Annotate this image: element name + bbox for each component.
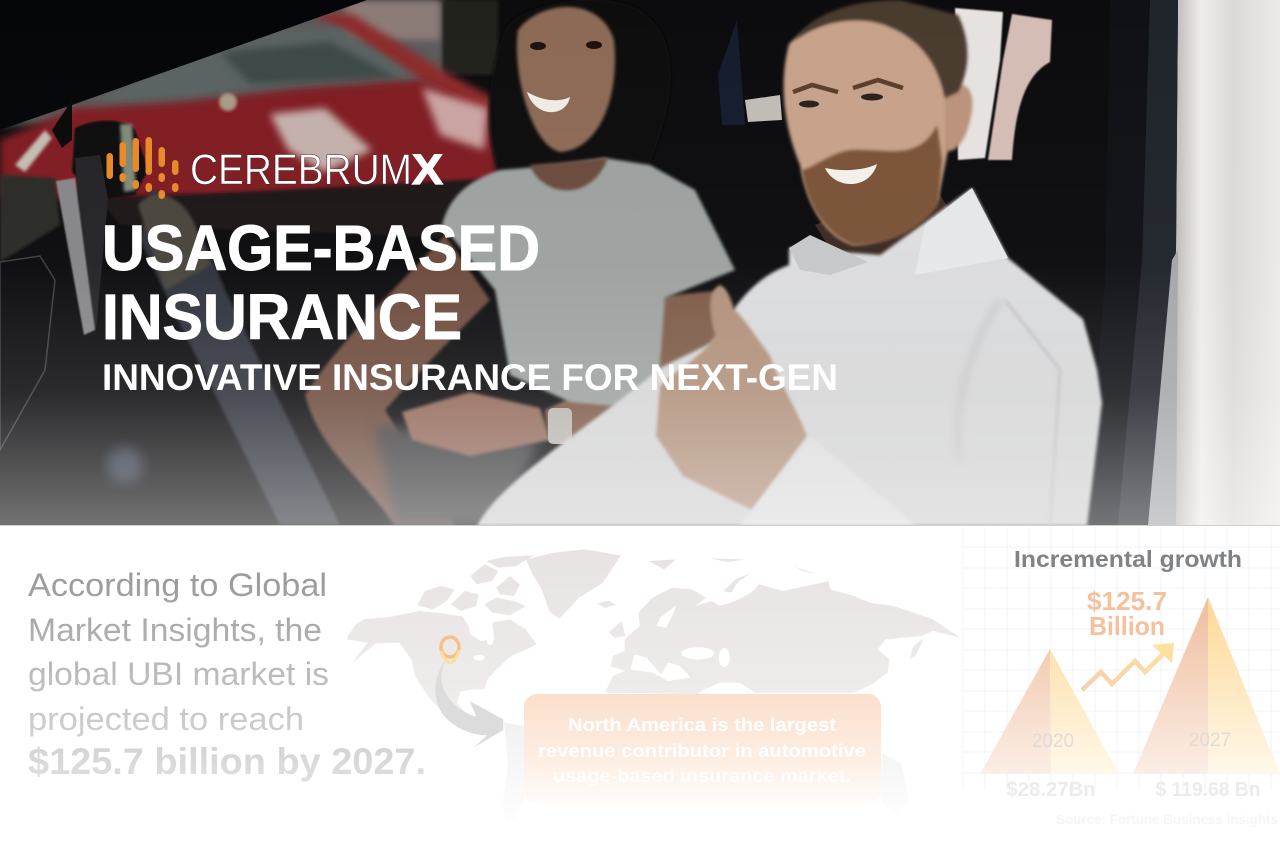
face <box>784 14 950 245</box>
man <box>477 0 1102 526</box>
title: INSURANCE <box>102 281 462 353</box>
icon: location pin <box>441 637 459 663</box>
logo: CerebrumX: X <box>412 146 443 194</box>
door pillar right <box>1175 0 1280 525</box>
panel: incremental growth chart <box>963 527 1280 827</box>
woman <box>305 0 735 525</box>
text block: market projection: $125.7 billion by 2027. <box>28 741 426 782</box>
shirt <box>477 188 1102 526</box>
title <box>102 212 540 353</box>
triangle: 2020 <box>980 649 1119 801</box>
dashboard and sill <box>0 175 60 262</box>
ear <box>945 84 972 151</box>
door pillar, dark wedge top left <box>0 0 367 130</box>
forearm <box>545 290 724 440</box>
subtitle: INNOVATIVE INSURANCE FOR NEXT-GEN <box>102 357 838 398</box>
world map <box>347 549 960 831</box>
triangle: 2027 <box>1133 597 1280 801</box>
wordmark: CEREBRUM <box>190 146 412 194</box>
beard <box>802 125 942 245</box>
inland seas <box>474 605 730 667</box>
callout: North America: revenue contributor in automotive <box>538 740 866 761</box>
teeth <box>825 164 877 184</box>
infotainment screen <box>75 155 108 330</box>
wing mirror <box>72 121 148 200</box>
value label: Billion <box>1089 611 1165 641</box>
text block: market projection <box>28 567 426 782</box>
text block: market projection: According to Global <box>28 567 327 603</box>
title: USAGE-BASED <box>102 212 540 284</box>
top <box>442 158 735 410</box>
watch <box>548 408 572 444</box>
growth arrow <box>1082 643 1174 690</box>
arm <box>305 235 490 525</box>
triangle: 2020: $28.27Bn <box>1006 779 1096 801</box>
hair <box>795 0 967 98</box>
curved arrow <box>435 651 503 748</box>
callout: North America <box>524 694 881 804</box>
callout: North America: North America is the largest <box>568 714 836 735</box>
side panel <box>0 256 55 450</box>
hair <box>486 45 504 171</box>
triangle: 2027: 2027 <box>1189 730 1231 751</box>
jeans <box>375 425 540 525</box>
hand <box>402 392 550 456</box>
thumbs-up hand <box>656 285 807 510</box>
hero photo: couple in a car <box>0 0 1280 526</box>
cuff <box>741 456 914 525</box>
text block: market projection: projected to reach <box>28 701 304 737</box>
value label <box>1087 586 1167 641</box>
triangle: 2027: $ 119.68 Bn <box>1156 779 1260 801</box>
rear window top right <box>955 8 1003 160</box>
text block: market projection: Market Insights, the <box>28 612 322 648</box>
chart heading: Incremental growth <box>1014 546 1242 572</box>
icon: orange sound bars <box>106 137 178 199</box>
value label: $125.7 <box>1087 586 1167 616</box>
eyes and brows <box>793 80 903 92</box>
fade overlay <box>0 280 1280 525</box>
face <box>517 7 615 152</box>
triangle: 2020: 2020 <box>1032 731 1074 752</box>
neck <box>815 194 948 256</box>
parked red car through windscreen <box>0 0 500 198</box>
photo bottom edge <box>0 525 1280 526</box>
logo: CerebrumX <box>106 137 443 199</box>
text block: market projection: global UBI market is <box>28 656 329 692</box>
callout: North America: usage-based insurance market. <box>553 765 851 786</box>
steering wheel <box>138 190 340 525</box>
